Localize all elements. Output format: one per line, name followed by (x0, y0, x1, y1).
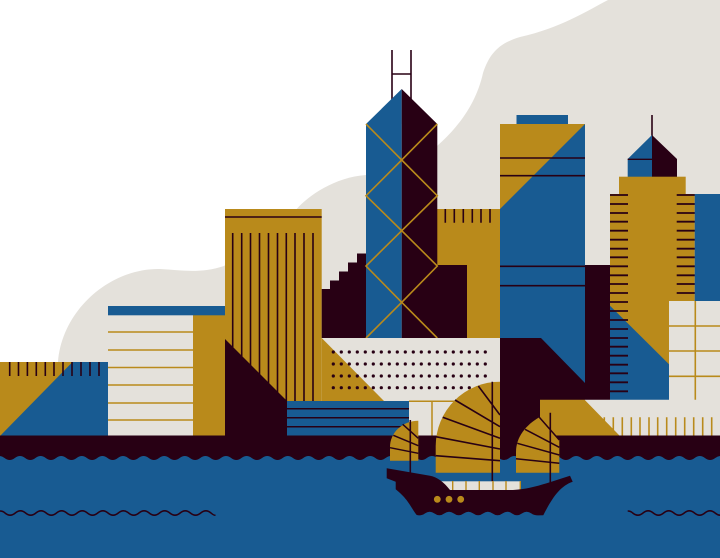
masts (410, 382, 550, 491)
building: far right cream grid block (669, 301, 720, 400)
waterfront: gold wedge and cream wharf (540, 400, 720, 436)
portholes (434, 496, 464, 503)
building: low blue striped block (287, 401, 409, 436)
building: cream podium with dot grid (322, 338, 500, 401)
building: gold block behind bank tower (437, 209, 500, 339)
building: right gold tower with spire (610, 115, 695, 400)
building: dark central block (500, 265, 610, 436)
building: far left gold and blue block (0, 362, 108, 436)
water ripple: left (0, 511, 216, 515)
shoreline: dark strip (0, 436, 720, 464)
building: low cream block behind sail (409, 401, 500, 436)
junk boat (387, 382, 573, 515)
building: Bank of China tower (366, 50, 437, 338)
water with wavy top edge (0, 456, 720, 558)
background cloud shape (58, 0, 720, 440)
sail: main (436, 382, 500, 473)
building: dark stepped block (322, 254, 366, 338)
sail: left (390, 421, 418, 461)
cabin (440, 481, 521, 491)
building: blue tower with gold corner (500, 115, 585, 384)
sail: right (516, 417, 559, 473)
water ripple: right (628, 511, 720, 515)
building: tall gold tower with vertical stripes (225, 209, 322, 436)
building: cream block with blue roof (108, 306, 225, 436)
building: far right blue block (695, 194, 720, 301)
hull (387, 468, 573, 515)
